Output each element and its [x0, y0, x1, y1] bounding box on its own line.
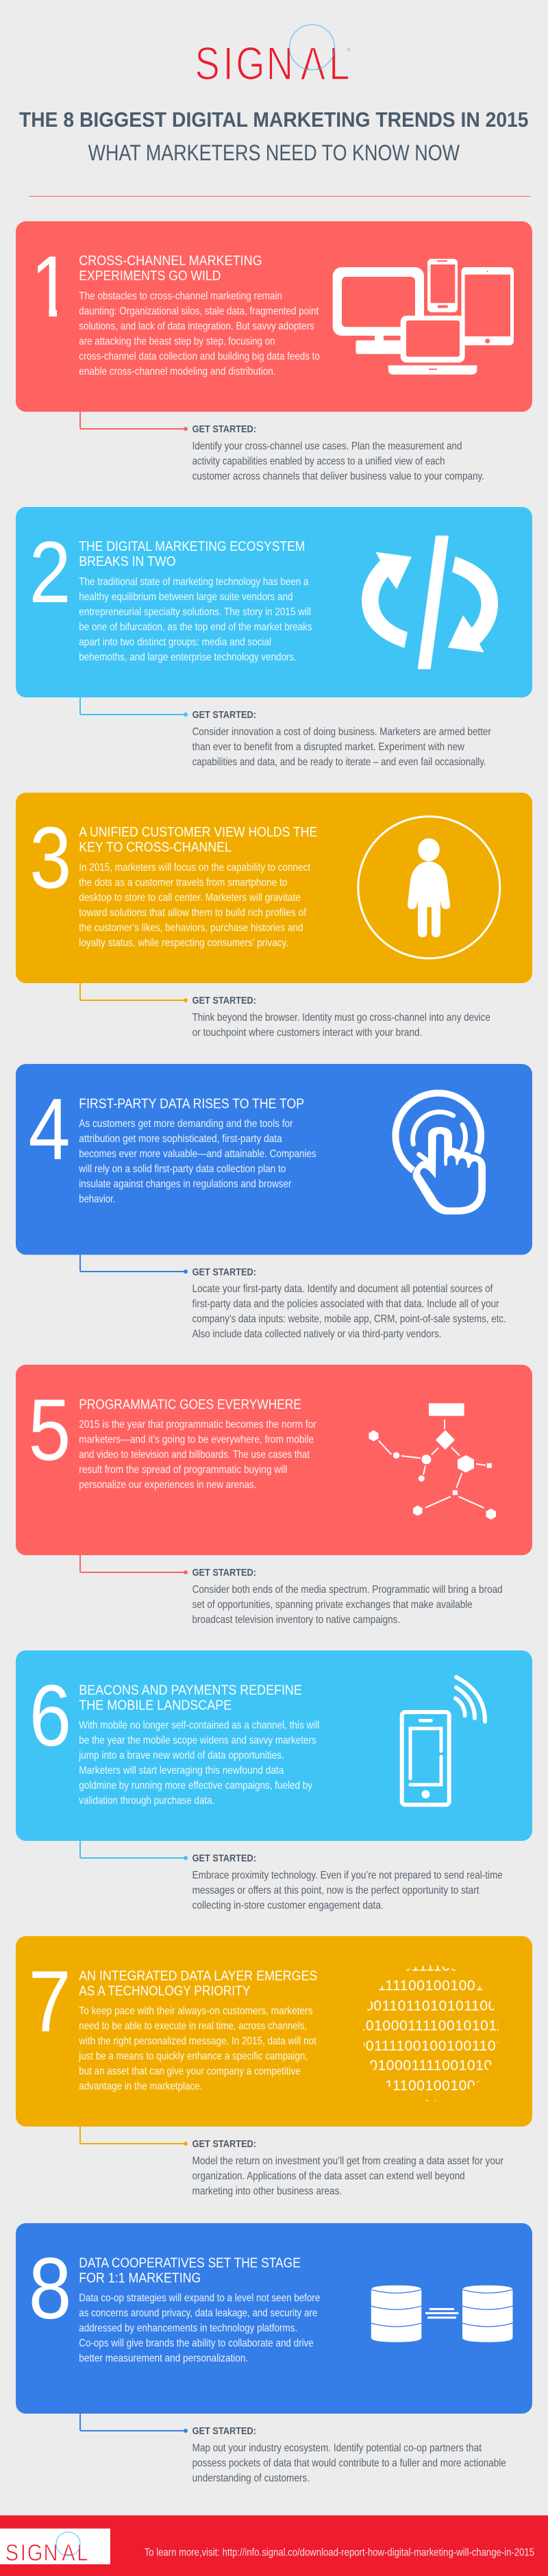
icon: broken sync arrows	[362, 536, 498, 669]
body text: Co-ops will give brands the ability to collaborate and drive	[79, 2338, 314, 2349]
get started: understanding of customers.	[192, 2473, 310, 2484]
body text: enable cross-channel modeling and distribution.	[79, 366, 276, 377]
body text	[79, 862, 310, 949]
body text: addressed by enhancements in technology platforms.	[79, 2323, 297, 2334]
icon: binary data sphere: 001111001001001101	[358, 2038, 504, 2054]
body text: advantage in the marketplace.	[79, 2081, 202, 2092]
number 5: 5	[28, 1381, 71, 1478]
body text: Marketers will start leveraging this newfound data	[79, 1765, 284, 1776]
heading: BEACONS AND PAYMENTS REDEFINE	[79, 1683, 302, 1698]
get started: Think beyond the browser. Identity must go cross-channel into any device	[192, 1012, 490, 1024]
body text: be the year the mobile scope widens and savvy marketers	[79, 1735, 316, 1746]
icon: programmatic network	[369, 1403, 496, 1520]
connector	[80, 697, 188, 717]
get started: marketing into other business areas.	[192, 2185, 342, 2197]
get started: GET STARTED:	[192, 995, 256, 1006]
number 8: 8	[29, 2240, 71, 2337]
get started: GET STARTED:	[192, 1567, 256, 1578]
panel: trend 8	[16, 2223, 532, 2484]
card background	[16, 507, 532, 697]
number 1: 1	[31, 238, 71, 335]
icon: devices	[333, 259, 514, 375]
number 6: 6	[29, 1667, 71, 1764]
panel: trend 7	[16, 1936, 532, 2197]
get started: GET STARTED:	[192, 1266, 256, 1278]
body text: just be a means to quickly enhance a specific campaign,	[78, 2051, 308, 2062]
body text: are attacking the beast step by step, focusing on	[79, 336, 275, 347]
body text: Data co-op strategies will expand to a level not seen before	[79, 2292, 320, 2304]
body text	[79, 290, 320, 377]
get started: Identify your cross-channel use cases. Plan the measurement and	[192, 441, 462, 452]
body text: The traditional state of marketing technology has been a	[79, 576, 309, 588]
connector	[80, 412, 188, 431]
get started: Locate your first-party data. Identify and document all potential sources of	[192, 1283, 493, 1295]
body text	[78, 1118, 316, 1205]
connector	[80, 1255, 188, 1274]
get started: Consider innovation a cost of doing business. Marketers are armed better	[192, 726, 491, 738]
connector	[80, 983, 188, 1002]
icon: binary data sphere: 100110110101011001	[357, 1998, 505, 2014]
heading: EXPERIMENTS GO WILD	[79, 269, 221, 284]
body text: result from the spread of programmatic buying will	[79, 1464, 287, 1476]
get started	[192, 423, 484, 482]
icon: binary data sphere	[363, 1965, 499, 2101]
body text: With mobile no longer self-contained as a channel, this will	[79, 1720, 319, 1731]
card background	[16, 1650, 532, 1841]
get started: GET STARTED:	[192, 709, 256, 721]
heading	[79, 1969, 317, 1999]
body text: entrepreneurial specialty solutions. The story in 2015 will	[79, 606, 311, 618]
body text: attribution get more sophisticated, first-party data	[79, 1133, 282, 1145]
heading	[79, 539, 305, 569]
number 2: 2	[29, 523, 71, 621]
icon: binary data sphere: 1110111100111	[380, 1959, 482, 1974]
connector	[80, 2127, 188, 2146]
body text: 2015 is the year that programmatic becomes the norm for	[79, 1419, 316, 1431]
heading: FOR 1:1 MARKETING	[79, 2270, 201, 2286]
get started: Map out your industry ecosystem. Identify potential co-op partners that	[192, 2442, 482, 2454]
get started	[192, 709, 491, 768]
icon: phone with signal	[402, 1677, 485, 1805]
get started: GET STARTED:	[192, 423, 256, 435]
get started: Consider both ends of the media spectrum. Programmatic will bring a broad	[192, 1584, 503, 1596]
body text	[78, 2005, 316, 2092]
body text: behavior.	[79, 1193, 115, 1205]
card background	[16, 2223, 532, 2414]
connector	[80, 2414, 188, 2433]
heading: THE DIGITAL MARKETING ECOSYSTEM	[79, 539, 305, 554]
body text: marketers—and it’s going to be everywhere, from mobile	[79, 1434, 314, 1446]
body text: will rely on a solid first-party data collection plan to	[78, 1163, 286, 1175]
icon: binary data sphere: 1111001001001	[378, 2078, 484, 2094]
heading: THE MOBILE LANDSCAPE	[79, 1698, 232, 1713]
get started: activity capabilities enabled by access to a unified view of each	[192, 456, 445, 467]
icon: binary data sphere: 1011	[414, 2098, 447, 2114]
body text: better measurement and personalization.	[79, 2353, 248, 2364]
card background	[16, 1365, 532, 1555]
heading: CROSS-CHANNEL MARKETING	[79, 253, 262, 269]
body text: cross-channel data collection and building big data feeds to	[79, 351, 320, 362]
body text: need to be able to execute in real time, across channels,	[79, 2020, 307, 2032]
heading: A UNIFIED CUSTOMER VIEW HOLDS THE	[79, 825, 317, 840]
number 3: 3	[29, 809, 71, 906]
body text: healthy equilibrium between large suite vendors and	[79, 591, 293, 603]
body text: toward solutions that allow them to build rich profiles of	[79, 907, 306, 919]
panel: trend 6	[16, 1650, 532, 1911]
logo: Signal: SIGNAL	[195, 38, 349, 90]
get started: messages or offers at this point, now is the perfect opportunity to start	[192, 1885, 480, 1896]
get started: organization. Applications of the data asset can extend well beyond	[192, 2170, 465, 2182]
get started: GET STARTED:	[192, 2425, 256, 2437]
body text: goldmine by running more effective campaigns, fueled by	[79, 1780, 312, 1792]
subtitle: WHAT MARKETERS NEED TO KNOW NOW	[88, 140, 460, 165]
body text	[79, 1419, 316, 1491]
body text: becomes ever more valuable—and attainable. Companies	[79, 1148, 316, 1160]
body text: validation through purchase data.	[79, 1795, 214, 1807]
get started: than ever to benefit from a disrupted market. Experiment with new	[192, 741, 464, 753]
body text: apart into two distinct groups: media and social	[79, 636, 271, 648]
body text: be one of bifurcation, as the top end of the market breaks	[79, 621, 312, 633]
body text	[79, 576, 312, 663]
heading	[79, 825, 317, 855]
heading	[79, 2255, 301, 2286]
heading: AS A TECHNOLOGY PRIORITY	[79, 1984, 250, 1999]
icon: tapping hand	[395, 1093, 486, 1215]
panel: trend 2	[16, 507, 532, 768]
body text: In 2015, marketers will focus on the capability to connect	[79, 862, 310, 874]
panel: trend 4	[16, 1064, 532, 1340]
get started	[192, 2425, 506, 2484]
icon: two databases	[371, 2286, 512, 2342]
heading: FIRST-PARTY DATA RISES TO THE TOP	[79, 1096, 304, 1111]
body text: To keep pace with their always-on customers, marketers	[79, 2005, 313, 2017]
heading	[79, 1683, 302, 1713]
panel: trend 1	[16, 221, 532, 482]
connector	[80, 1841, 188, 1860]
body text: solutions, and lack of data integration. But savvy adopters	[79, 321, 314, 332]
icon: binary data sphere: 101000111100101011	[358, 2018, 504, 2034]
heading: PROGRAMMATIC GOES EVERYWHERE	[79, 1398, 301, 1413]
heading: DATA COOPERATIVES SET THE STAGE	[79, 2255, 301, 2270]
body text	[79, 2292, 320, 2364]
body text: personalize our experiences in new arenas.	[79, 1479, 257, 1491]
footer	[0, 2516, 548, 2576]
body text: As customers get more demanding and the tools for	[79, 1118, 293, 1130]
get started: collecting in-store customer engagement data.	[192, 1900, 384, 1911]
body text: insulate against changes in regulations and browser	[79, 1178, 292, 1190]
heading: KEY TO CROSS-CHANNEL	[79, 840, 232, 855]
get started	[192, 1853, 503, 1911]
icon: binary data sphere: 1111001001001	[378, 1978, 484, 1994]
get started	[192, 2138, 504, 2197]
get started: GET STARTED:	[192, 2138, 256, 2150]
body text: as concerns around privacy, data leakage, and security are	[79, 2307, 317, 2319]
icon: person in circle	[358, 817, 500, 958]
body text: daunting: Organizational silos, stale data, fragmented point	[79, 306, 319, 317]
card background	[16, 1064, 532, 1255]
number 7: 7	[29, 1953, 71, 2050]
heading: AN INTEGRATED DATA LAYER EMERGES	[79, 1969, 317, 1984]
body text: loyalty status, while respecting consumers’ privacy.	[79, 937, 288, 949]
get started	[192, 995, 490, 1039]
body text: but an asset that can give your company a competitive	[79, 2066, 301, 2077]
heading: BREAKS IN TWO	[79, 554, 176, 569]
heading	[79, 253, 262, 284]
get started: broadcast television inventory to native campaigns.	[192, 1614, 400, 1626]
footer logo: SIGNAL	[5, 2539, 88, 2566]
get started: GET STARTED:	[192, 1853, 256, 1864]
body text: jump into a brave new world of data opportunities.	[78, 1750, 284, 1761]
body text: desktop to store to call center. Marketers will gravitate	[79, 892, 301, 904]
body text: behemoths, and large enterprise technology vendors.	[79, 652, 297, 663]
get started: first-party data and the policies associated with that data. Include all of your	[192, 1298, 499, 1310]
get started	[192, 1266, 506, 1340]
get started	[192, 1567, 503, 1626]
connector	[80, 1555, 188, 1574]
get started: set of opportunities, spanning private exchanges that make available	[192, 1599, 473, 1611]
get started: capabilities and data, and be ready to iterate – and even fail occasionally.	[192, 756, 486, 768]
body text: the customer’s likes, behaviors, purchase histories and	[79, 922, 303, 934]
get started: Also include data collected natively or via third-party vendors.	[192, 1328, 441, 1340]
body text: The obstacles to cross-channel marketing remain	[79, 290, 282, 302]
card background	[16, 1936, 532, 2127]
panel: trend 5	[16, 1365, 532, 1626]
logo: Signal: ®	[347, 48, 351, 53]
body text	[78, 1720, 319, 1807]
get started: or touchpoint where customers interact with your brand.	[192, 1027, 422, 1039]
number 4: 4	[29, 1080, 70, 1178]
body text: and video to television and billboards. The use cases that	[79, 1449, 310, 1461]
icon: binary data sphere: 010001111001010	[369, 2058, 493, 2074]
body text: the dots as a customer travels from smartphone to	[79, 877, 287, 889]
panel: trend 3	[16, 793, 532, 1039]
get started: customer across channels that deliver business value to your company.	[192, 471, 484, 482]
card background	[16, 221, 532, 412]
body text: with the right personalized message. In 2015, data will not	[78, 2035, 316, 2047]
card background	[16, 793, 532, 983]
footer logo	[0, 2529, 110, 2566]
